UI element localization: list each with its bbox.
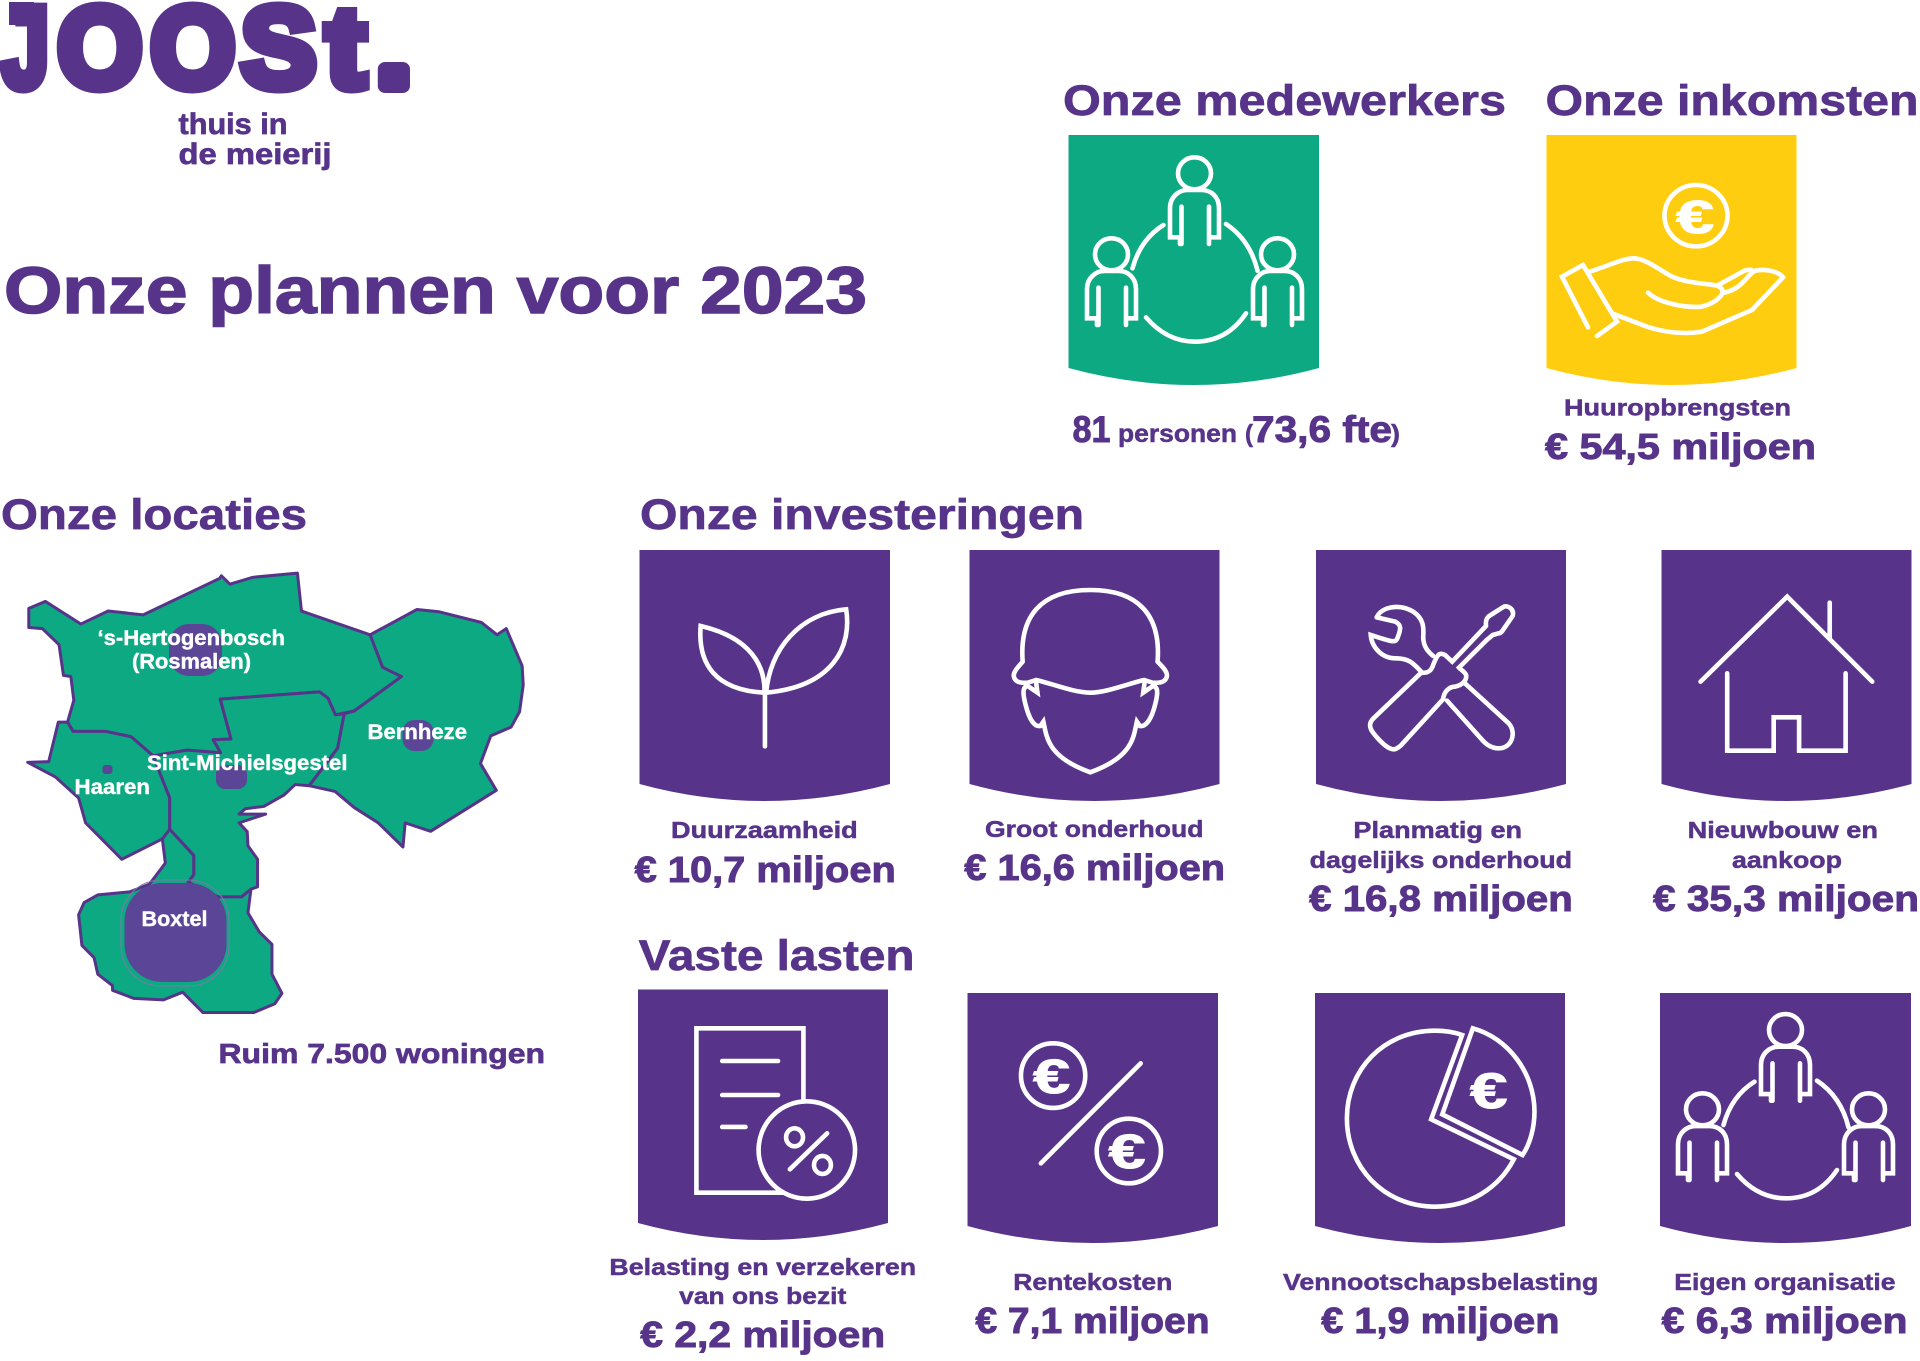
icon: wrench and screwdriver <box>1370 606 1513 749</box>
card: planmatig onderhoud: dagelijks onderhoud <box>1310 847 1572 873</box>
card: nieuwbouw: Nieuwbouw en <box>1688 817 1878 843</box>
icon: euro divided by euro: € <box>1033 1051 1070 1104</box>
icon: document with percent <box>696 1028 855 1199</box>
map: labels: ‘s-Hertogenbosch <box>98 627 285 650</box>
map: labels: (Rosmalen) <box>132 650 251 674</box>
logo: JOOSt.: de meierij <box>178 138 332 171</box>
card: duurzaamheid: Duurzaamheid <box>671 817 858 843</box>
card: groot onderhoud <box>964 550 1225 888</box>
stat: personen: personen <box>1118 420 1237 448</box>
heading: onze medewerkers: Onze medewerkers <box>1063 77 1506 125</box>
card: planmatig onderhoud: € 16,8 miljoen <box>1309 878 1573 919</box>
stat: woningen: Ruim 7.500 woningen <box>218 1038 545 1069</box>
icon: people in circle <box>1087 157 1302 342</box>
logo: JOOSt.: thuis in <box>178 108 288 141</box>
card: rentekosten: Rentekosten <box>1013 1269 1172 1295</box>
card: eigen organisatie: € 6,3 miljoen <box>1662 1300 1908 1341</box>
card: vennootschapsbelasting: Vennootschapsbelasting <box>1283 1269 1598 1295</box>
card: groot onderhoud: € 16,6 miljoen <box>964 847 1225 888</box>
card: rentekosten: € 7,1 miljoen <box>975 1300 1210 1341</box>
stat: personen: ) <box>1391 420 1400 448</box>
shield: yellow <box>1546 135 1796 385</box>
icon: pie chart with euro: € <box>1470 1063 1508 1119</box>
stat: huuropbrengsten <box>1545 394 1816 467</box>
card: eigen organisatie: Eigen organisatie <box>1674 1269 1896 1295</box>
card: groot onderhoud: Groot onderhoud <box>985 816 1204 842</box>
card: belasting en verzekeren: Belasting en verzekeren <box>609 1254 916 1280</box>
icon: house <box>1701 597 1872 751</box>
card: duurzaamheid: € 10,7 miljoen <box>635 849 896 890</box>
stat: personen: 81 <box>1072 409 1110 450</box>
heading: vaste lasten: Vaste lasten <box>639 932 915 980</box>
card: belasting en verzekeren <box>609 990 916 1355</box>
stat: huuropbrengsten: Huuropbrengsten <box>1564 394 1791 420</box>
map: labels: Bernheze <box>368 721 467 744</box>
icon: helmet head <box>1014 590 1167 772</box>
panel: onze locaties <box>1 491 545 1069</box>
card: nieuwbouw: € 35,3 miljoen <box>1653 878 1919 919</box>
shield: green <box>1068 135 1319 385</box>
card: nieuwbouw: aankoop <box>1732 847 1842 873</box>
map: labels: Haaren <box>74 776 150 799</box>
card: vennootschapsbelasting: € 1,9 miljoen <box>1321 1300 1560 1341</box>
panel: inkomsten <box>1545 77 1918 467</box>
map: labels: Boxtel <box>142 908 208 931</box>
icon: euro divided by euro <box>1021 1043 1161 1183</box>
card: duurzaamheid <box>635 550 896 890</box>
stat: personen: ( <box>1245 420 1254 448</box>
card: belasting en verzekeren: van ons bezit <box>679 1283 846 1309</box>
icon: hand with euro coin <box>1562 185 1783 336</box>
stat: huuropbrengsten: € 54,5 miljoen <box>1545 426 1816 467</box>
icon: people in circle <box>1678 1014 1893 1198</box>
heading: onze inkomsten: Onze inkomsten <box>1546 77 1918 125</box>
title: Onze plannen voor 2023 <box>4 253 867 327</box>
stat: personen <box>1072 409 1400 450</box>
card: planmatig onderhoud <box>1309 550 1573 919</box>
icon: hand with euro coin: € <box>1676 191 1714 243</box>
heading: onze locaties: Onze locaties <box>1 491 307 539</box>
map: blobs <box>102 624 434 986</box>
icon: euro divided by euro: € <box>1108 1126 1146 1179</box>
stat: personen: 73,6 fte <box>1252 409 1392 450</box>
card: nieuwbouw <box>1653 550 1919 919</box>
icon: plant <box>700 609 847 746</box>
card: eigen organisatie <box>1660 993 1911 1341</box>
card: planmatig onderhoud: Planmatig en <box>1353 817 1522 843</box>
card: vennootschapsbelasting <box>1283 993 1598 1341</box>
heading: onze investeringen: Onze investeringen <box>640 491 1084 539</box>
logo: JOOSt. <box>2 0 411 171</box>
panel: medewerkers <box>1063 77 1506 450</box>
map: labels <box>74 627 467 931</box>
panel: onze investeringen <box>635 491 1919 919</box>
map: municipalities <box>28 573 523 1013</box>
map: labels: Sint-Michielsgestel <box>147 752 348 775</box>
card: belasting en verzekeren: € 2,2 miljoen <box>640 1314 885 1355</box>
card: rentekosten <box>968 993 1218 1341</box>
icon: pie chart with euro <box>1347 1028 1534 1207</box>
panel: vaste lasten <box>609 932 1911 1355</box>
